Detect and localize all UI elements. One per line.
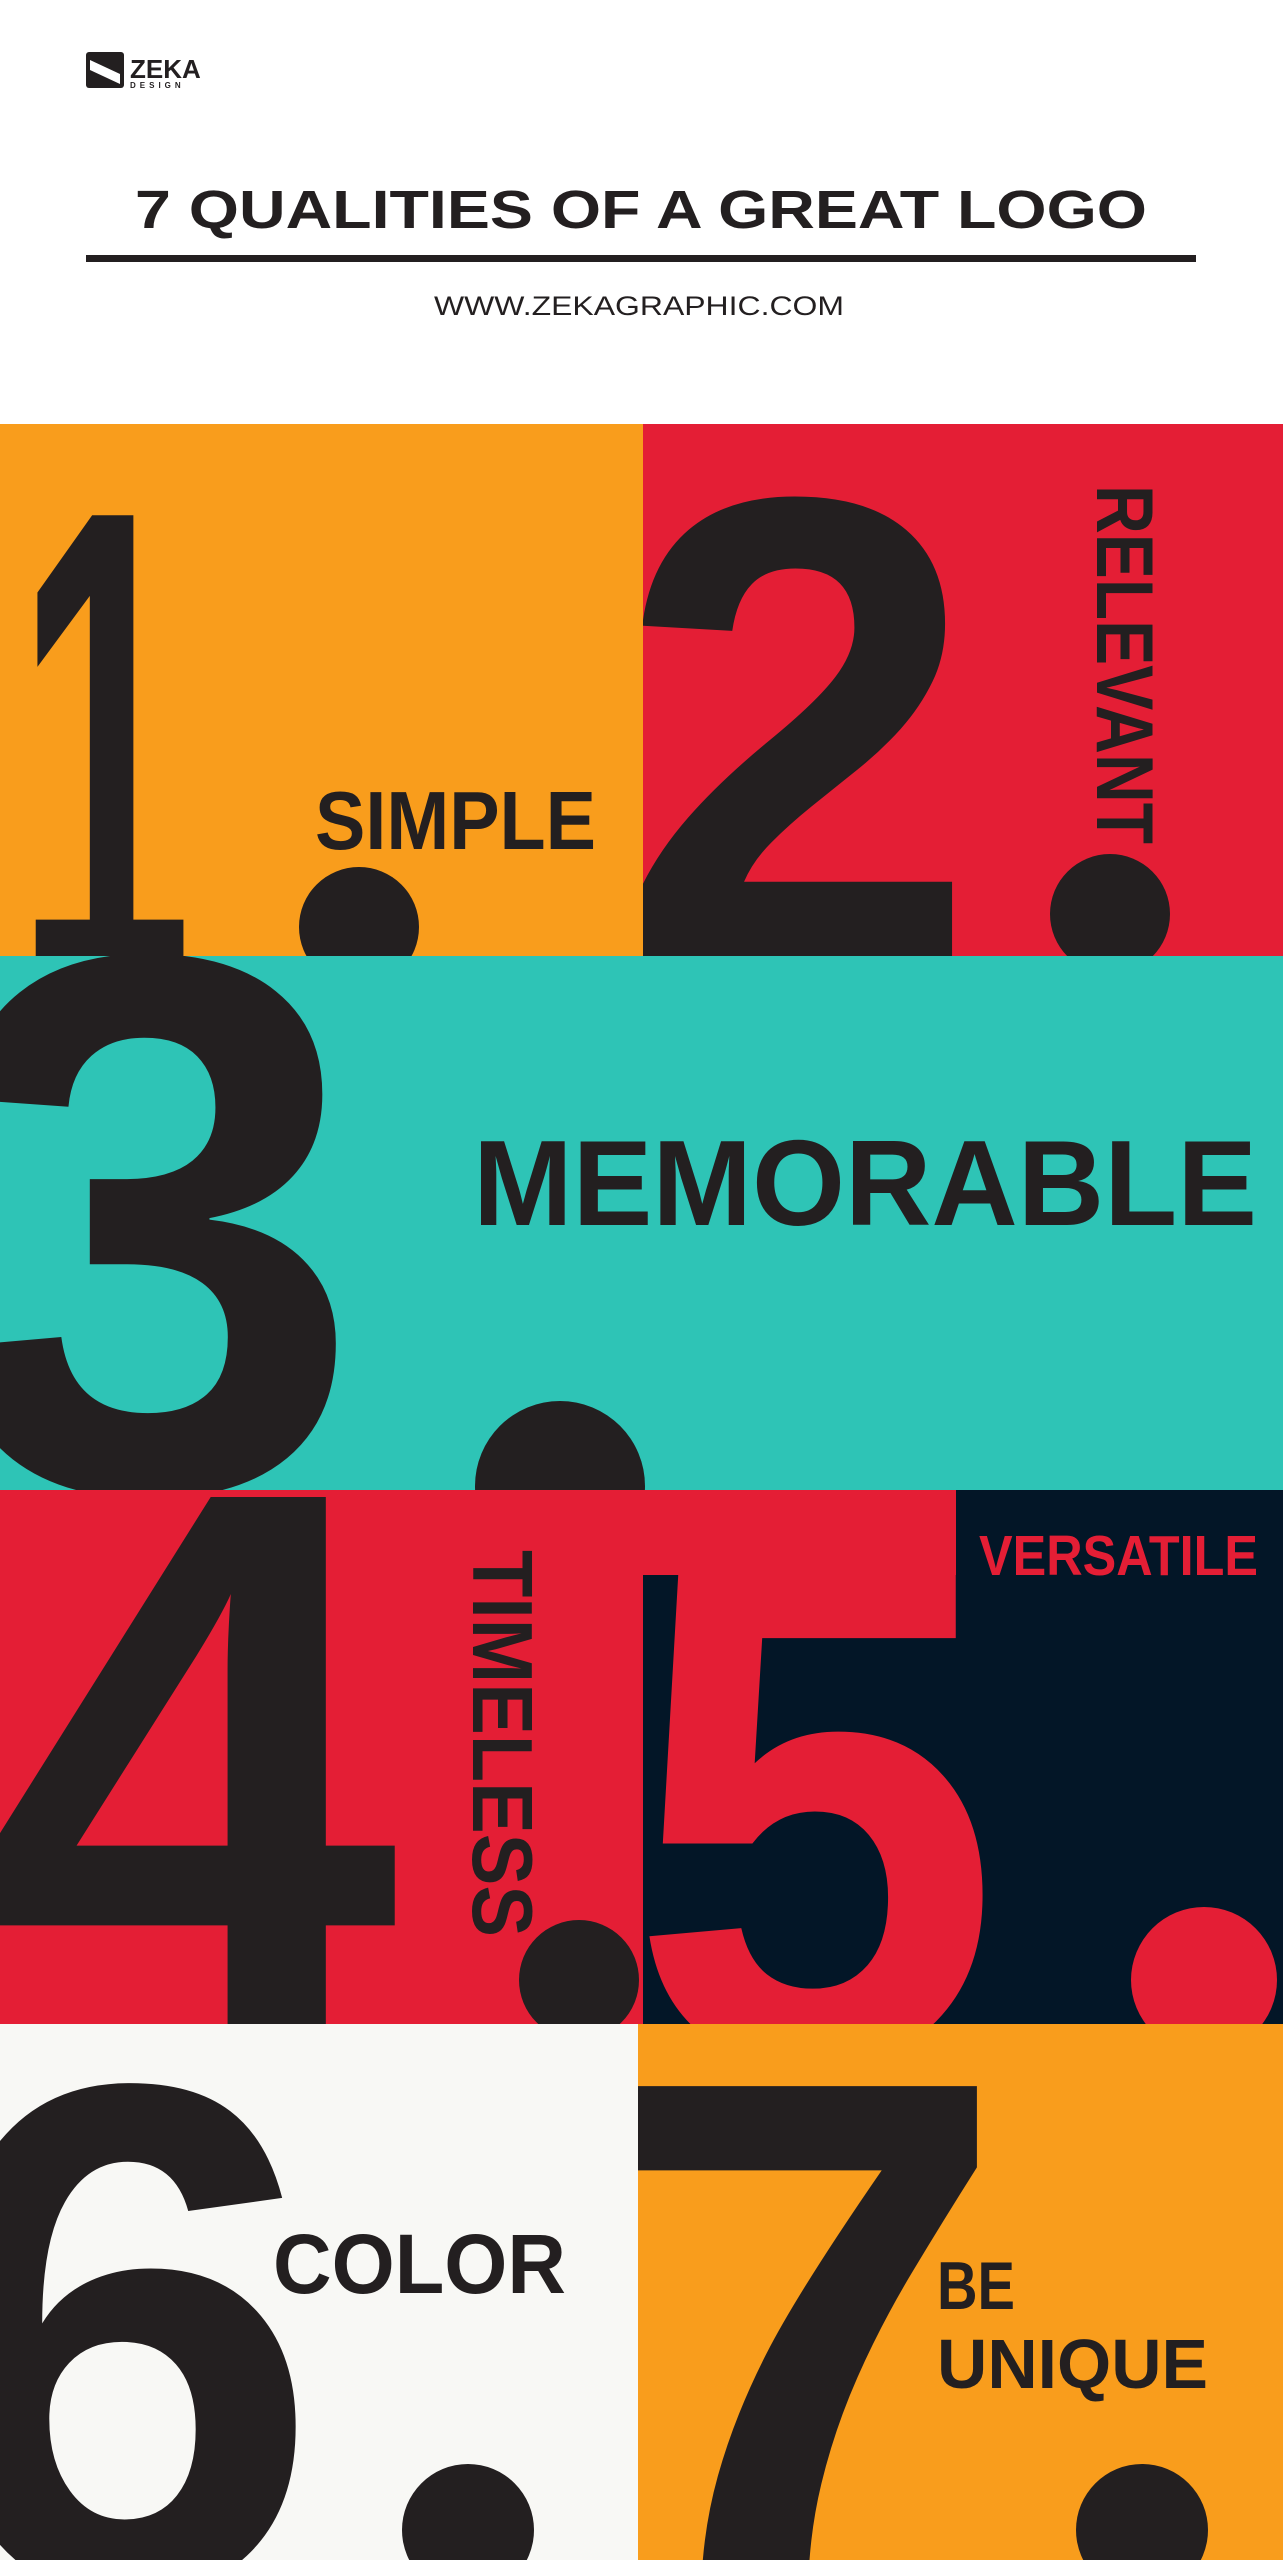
- logo: DESIGN: [130, 81, 185, 90]
- label: be unique: UNIQUE: [937, 2325, 1208, 2403]
- numeral 1: 1: [16, 366, 192, 1136]
- panel: 2 relevant: [643, 424, 1283, 956]
- label: timeless: TIMELESS: [454, 1550, 549, 1937]
- label: simple: SIMPLE: [315, 774, 596, 867]
- label: memorable: MEMORABLE: [473, 1115, 1257, 1251]
- numeral 2: 2: [616, 360, 978, 1096]
- numeral 5: 5: [629, 1410, 1001, 2213]
- dot: [475, 1401, 645, 1490]
- label: relevant: RELEVANT: [1079, 485, 1169, 844]
- logo: ZEKA: [130, 54, 201, 84]
- title: 7 QUALITIES OF A GREAT LOGO: [135, 180, 1147, 240]
- label: color: COLOR: [273, 2217, 566, 2311]
- panel: 6 color: [0, 2024, 638, 2560]
- url: WWW.ZEKAGRAPHIC.COM: [434, 291, 844, 321]
- dot: [299, 867, 419, 956]
- dot: [402, 2464, 534, 2560]
- dot: [1050, 854, 1170, 956]
- label: be unique: BE: [937, 2248, 1015, 2324]
- panel: 5 versatile: [643, 1490, 1283, 2024]
- panel: 1 simple: [0, 424, 643, 956]
- logo: [86, 52, 201, 90]
- label: be unique: [937, 2248, 1208, 2403]
- panel: 4 timeless: [0, 1490, 643, 2024]
- dot: [1076, 2464, 1208, 2560]
- panel: 3 memorable: [0, 956, 1283, 1490]
- panel: 7 be unique: [638, 2024, 1283, 2560]
- dot: [519, 1920, 639, 2024]
- dot: [1131, 1907, 1277, 2024]
